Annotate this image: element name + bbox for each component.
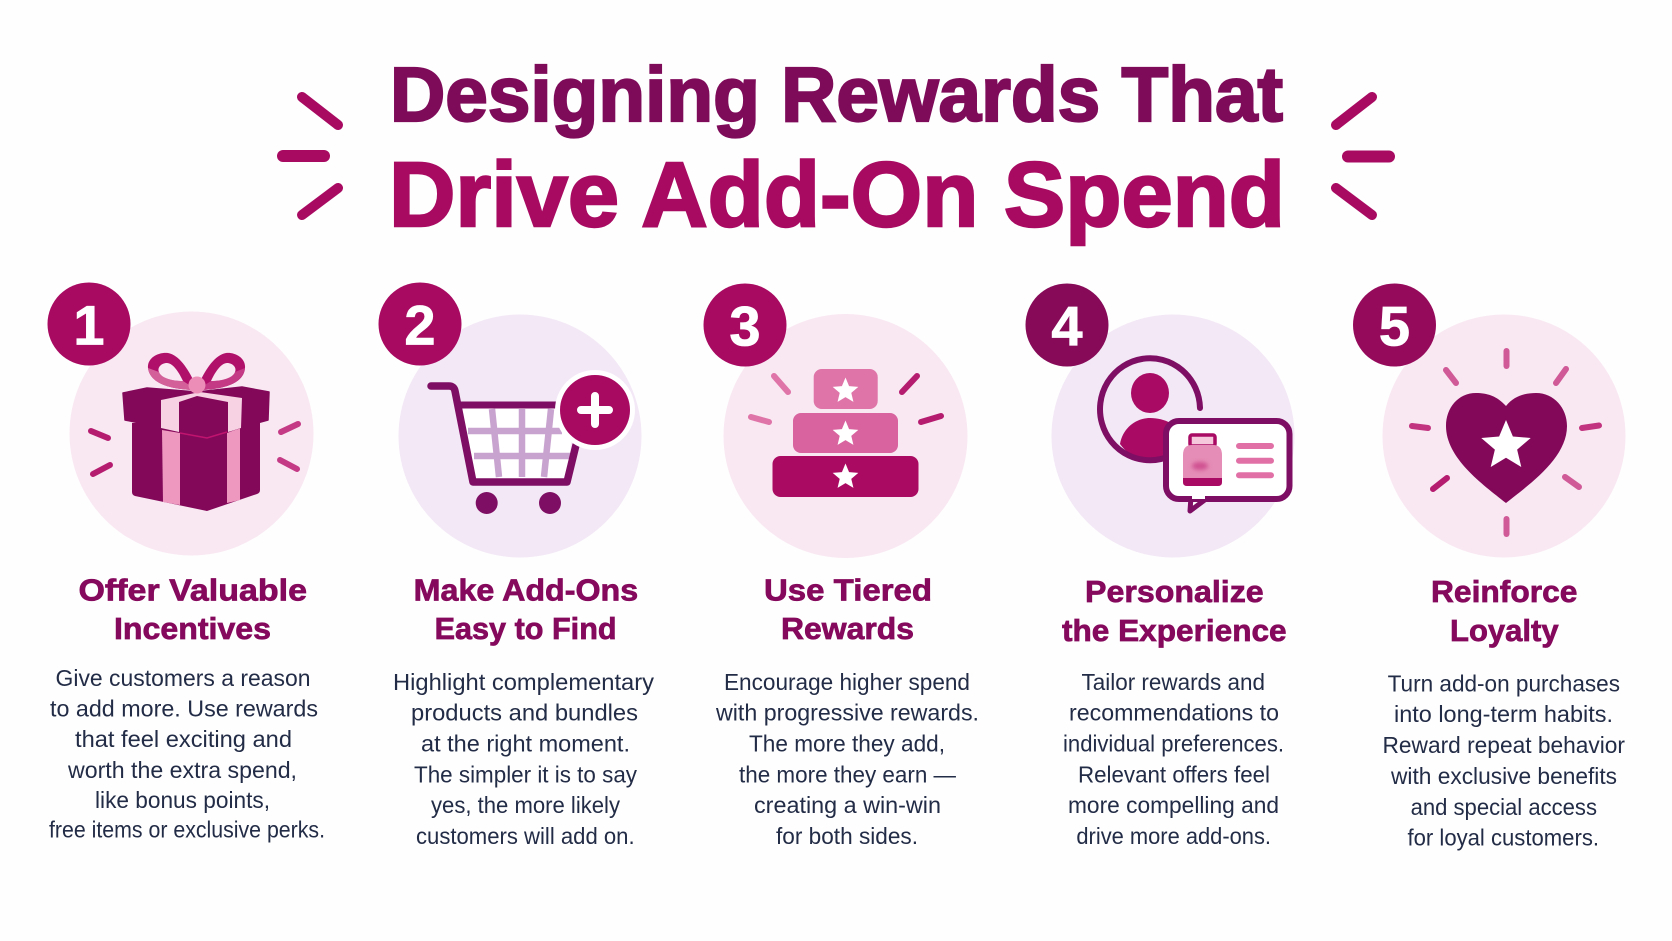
panel: offer valuable incentives [48, 282, 325, 842]
description 5: and special access [1411, 794, 1597, 820]
number badge 1: 1 [73, 294, 105, 356]
description 4: recommendations to [1069, 700, 1279, 726]
number badge 1 [48, 282, 130, 366]
panel: use tiered rewards [704, 284, 979, 849]
description 5: Turn add-on purchases [1388, 671, 1620, 697]
icon: gift box [123, 353, 269, 511]
description 3: with progressive rewards. [715, 700, 979, 726]
description 4: drive more add-ons. [1076, 823, 1271, 849]
description 1: like bonus points, [95, 787, 270, 813]
icon: gift sparkles [91, 424, 298, 474]
heading 1 [78, 572, 307, 646]
description 2: at the right moment. [421, 731, 630, 757]
description 5: with exclusive benefits [1390, 763, 1617, 789]
description 4: Relevant offers feel [1078, 762, 1270, 788]
title: Drive Add-On Spend [389, 144, 1285, 246]
icon: heart with star [1446, 393, 1567, 503]
icon: product card speech bubble [1166, 421, 1290, 511]
icon: plus badge [555, 370, 635, 450]
background circle 5 [1382, 314, 1626, 558]
description 2: Highlight complementary [393, 669, 654, 695]
description 1: Give customers a reason [56, 665, 310, 691]
background circle 4 [1052, 314, 1294, 558]
description 2: products and bundles [411, 700, 638, 726]
icon: tier rays [751, 376, 941, 422]
icon: customer profile [1100, 358, 1200, 460]
number badge 3: 3 [729, 294, 761, 358]
panel: make add-ons easy to find [378, 282, 654, 849]
background circle 2 [398, 314, 642, 558]
heading 2: Make Add-Ons [414, 572, 638, 608]
background circle 3 [724, 314, 968, 558]
description 2: customers will add on. [416, 823, 635, 849]
heading 1: Incentives [114, 611, 271, 646]
heading 2 [414, 572, 638, 646]
heading 3: Use Tiered [764, 572, 932, 608]
number badge 3 [704, 284, 786, 366]
description 3: creating a win-win [754, 792, 941, 818]
title: Designing Rewards That [390, 52, 1283, 138]
description 4 [1063, 669, 1284, 849]
description 2: The simpler it is to say [414, 762, 637, 788]
description 3 [715, 669, 979, 849]
description 4: more compelling and [1068, 792, 1279, 818]
heading 5: Loyalty [1450, 613, 1559, 648]
icon: tiered stack with stars [772, 369, 918, 497]
heading 2: Easy to Find [435, 611, 617, 646]
number badge 4: 4 [1051, 294, 1083, 358]
icon: shopping cart [431, 386, 576, 514]
description 5: Reward repeat behavior [1382, 732, 1625, 758]
heading 4: the Experience [1062, 613, 1287, 648]
title accent rays: right [1336, 97, 1389, 215]
description 5 [1382, 671, 1625, 851]
description 3: for both sides. [776, 823, 918, 849]
description 1: to add more. Use rewards [50, 696, 318, 722]
description 2 [393, 669, 654, 849]
description 4: Tailor rewards and [1082, 669, 1265, 695]
description 3: The more they add, [749, 731, 945, 757]
description 4: individual preferences. [1063, 731, 1284, 757]
number badge 2: 2 [404, 294, 436, 356]
heading 4: Personalize [1085, 574, 1264, 609]
number badge 5: 5 [1379, 294, 1410, 358]
bow drawn as solid loops with holes [148, 353, 197, 390]
icon: heart rays [1412, 351, 1599, 534]
heading 4 [1062, 574, 1287, 648]
heading 3 [764, 572, 932, 646]
description 1 [49, 665, 325, 842]
description 1: worth the extra spend, [67, 757, 297, 783]
description 5: for loyal customers. [1408, 825, 1599, 851]
panel: reinforce loyalty [1353, 284, 1626, 851]
number badge 5 [1353, 284, 1436, 366]
description 1: free items or exclusive perks. [49, 816, 325, 842]
background circle 1 [70, 312, 314, 556]
heading 5 [1431, 574, 1577, 648]
description 1: that feel exciting and [75, 726, 292, 752]
title accent rays: left [283, 97, 338, 215]
heading 5: Reinforce [1431, 574, 1577, 609]
description 3: the more they earn — [739, 762, 956, 788]
description 5: into long-term habits. [1394, 701, 1613, 727]
description 2: yes, the more likely [431, 792, 620, 818]
number badge 4 [1026, 284, 1108, 366]
number badge 2 [378, 282, 462, 366]
description 3: Encourage higher spend [724, 669, 970, 695]
panel: personalize the experience [1026, 284, 1294, 849]
heading 1: Offer Valuable [78, 572, 307, 608]
heading 3: Rewards [781, 611, 914, 646]
title [389, 52, 1285, 246]
